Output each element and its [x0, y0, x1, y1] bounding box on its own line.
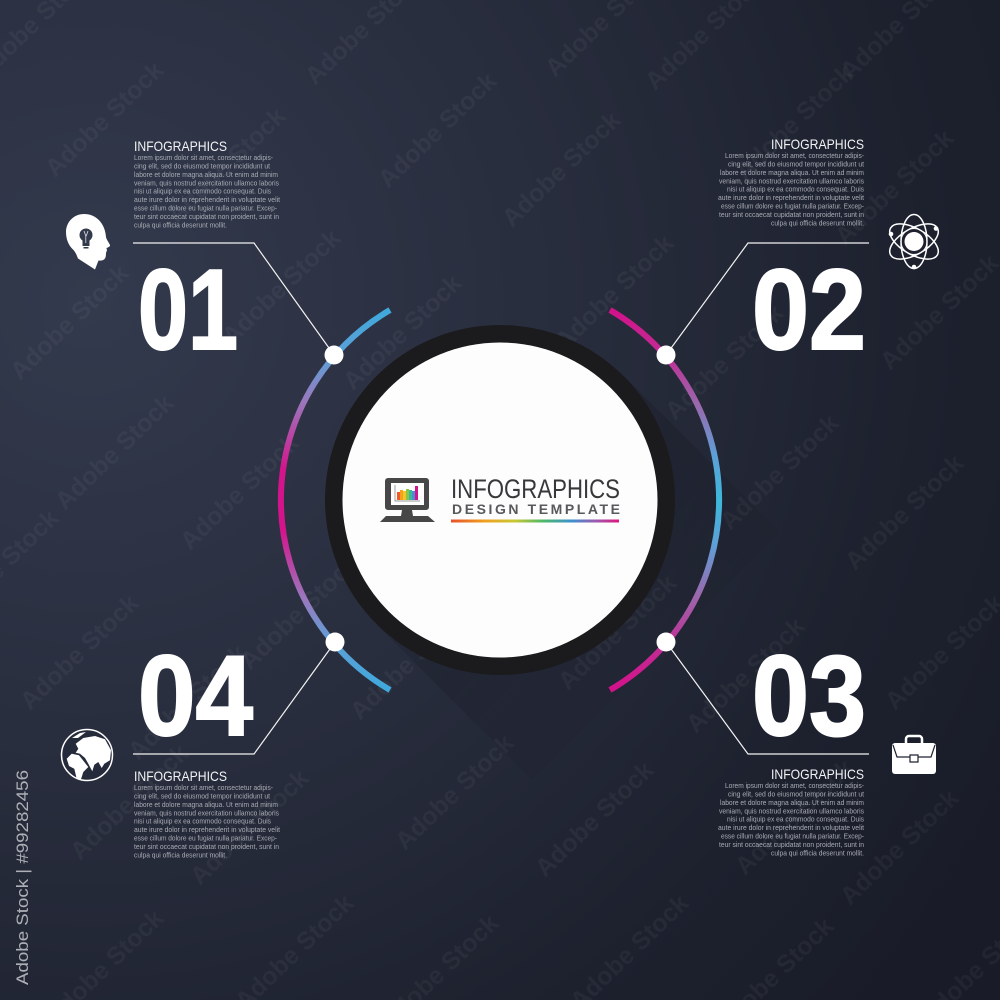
- body 02: cing elit, sed do eiusmod tempor incididunt ut: [728, 159, 864, 168]
- body 03: Lorem ipsum dolor sit amet, consectetur adipis-: [725, 781, 865, 790]
- heading 01: INFOGRAPHICS: [134, 139, 227, 154]
- body 03: teur sint occaecat cupidatat non proident, sunt in: [719, 840, 864, 849]
- body 02: Lorem ipsum dolor sit amet, consectetur adipis-: [725, 151, 865, 160]
- watermark pattern: Adobe Stock: [553, 569, 682, 695]
- body 04: [134, 783, 280, 860]
- body 03: nisi ut aliquip ex ea commodo consequat. Duis: [727, 815, 864, 824]
- watermark pattern: Adobe Stock: [715, 409, 844, 535]
- watermark pattern: Adobe Stock: [840, 449, 969, 575]
- connector 02: [656, 243, 869, 364]
- watermark pattern: Adobe Stock: [40, 56, 169, 182]
- watermark pattern: Adobe Stock: [338, 269, 467, 395]
- number 01: 01: [138, 247, 238, 374]
- heading 03: INFOGRAPHICS: [771, 767, 864, 782]
- body 03: culpa qui officia deserunt mollit.: [771, 848, 864, 858]
- watermark pattern: Adobe Stock: [5, 259, 134, 385]
- number 03: 03: [752, 633, 866, 760]
- watermark pattern: Adobe Stock: [660, 299, 789, 425]
- icon: globe: [62, 730, 112, 780]
- body 04: esse cillum dolore eu fugiat nulla pariatur. Excep-: [134, 834, 278, 843]
- watermark pattern: Adobe Stock: [123, 639, 252, 765]
- body 02: esse cillum dolore eu fugiat nulla pariatur. Excep-: [721, 202, 865, 211]
- text block 01: [134, 139, 280, 230]
- body 02: nisi ut aliquip ex ea commodo consequat. Duis: [727, 185, 864, 194]
- watermark pattern: Adobe Stock: [65, 739, 194, 865]
- left gradient arc: [281, 310, 390, 690]
- watermark pattern: Adobe Stock: [345, 599, 474, 725]
- body 04: cing elit, sed do eiusmod tempor incididunt ut: [134, 791, 270, 800]
- watermark pattern: Adobe Stock: [550, 229, 679, 355]
- body 02: culpa qui officia deserunt mollit.: [771, 218, 864, 228]
- body 02: [718, 151, 865, 228]
- watermark pattern: Adobe Stock: [390, 729, 519, 855]
- body 04: veniam, quis nostrud exercitation ullamco laboris: [134, 808, 279, 817]
- watermark pattern: Adobe Stock: [373, 67, 502, 193]
- watermark pattern: Adobe Stock: [217, 224, 346, 350]
- body 04: nisi ut aliquip ex ea commodo consequat. Duis: [134, 817, 271, 826]
- long shadow of central circle: [376, 376, 780, 780]
- body 01: esse cillum dolore eu fugiat nulla pariatur. Excep-: [134, 204, 278, 213]
- watermark pattern: Adobe Stock: [50, 389, 179, 515]
- watermark pattern: Adobe Stock: [15, 589, 144, 715]
- text block 04: [134, 769, 280, 860]
- rainbow bar: [451, 520, 619, 522]
- body 01: veniam, quis nostrud exercitation ullamco laboris: [134, 178, 279, 187]
- watermark pattern: Adobe Stock: [681, 612, 810, 738]
- body 03: esse cillum dolore eu fugiat nulla pariatur. Excep-: [721, 832, 865, 841]
- heading 04: INFOGRAPHICS: [134, 769, 227, 784]
- body 02: labore et dolore magna aliqua. Ut enim ad minim: [720, 168, 864, 177]
- body 01: [134, 153, 280, 230]
- body 03: aute irure dolor in reprehenderit in voluptate velit: [718, 823, 864, 832]
- text block 02: [718, 137, 865, 228]
- heading 02: INFOGRAPHICS: [771, 137, 864, 152]
- body 01: cing elit, sed do eiusmod tempor incididunt ut: [134, 161, 270, 170]
- connector 03: [656, 632, 869, 754]
- body 03: labore et dolore magna aliqua. Ut enim ad minim: [720, 798, 864, 807]
- logo title: INFOGRAPHICS: [451, 474, 620, 504]
- watermark pattern: Adobe Stock: [730, 59, 859, 185]
- body 02: veniam, quis nostrud exercitation ullamco laboris: [719, 176, 864, 185]
- body 01: teur sint occaecat cupidatat non proident, sunt in: [134, 212, 279, 221]
- icon: computer monitor with bar chart: [380, 478, 435, 522]
- icon: head with light bulb: [66, 214, 110, 270]
- body 01: culpa qui officia deserunt mollit.: [134, 220, 227, 230]
- number 04: 04: [138, 633, 253, 760]
- body 04: teur sint occaecat cupidatat non proident, sunt in: [134, 842, 279, 851]
- connector 01: [133, 243, 344, 364]
- watermark pattern: Adobe Stock: [830, 124, 959, 250]
- body 02: aute irure dolor in reprehenderit in voluptate velit: [718, 193, 864, 202]
- icon: briefcase: [892, 736, 936, 774]
- body 01: labore et dolore magna aliqua. Ut enim ad minim: [134, 170, 278, 179]
- body 04: culpa qui officia deserunt mollit.: [134, 850, 227, 860]
- right gradient arc: [610, 310, 719, 690]
- watermark pattern: Adobe Stock: [175, 429, 304, 555]
- body 04: labore et dolore magna aliqua. Ut enim ad minim: [134, 800, 278, 809]
- body 03: veniam, quis nostrud exercitation ullamco laboris: [719, 806, 864, 815]
- text block 03: [718, 767, 865, 858]
- central logo: [380, 474, 620, 522]
- icon: atom: [884, 214, 944, 269]
- body 01: Lorem ipsum dolor sit amet, consectetur adipis-: [134, 153, 274, 162]
- central circle: [325, 325, 675, 675]
- logo subtitle: DESIGN TEMPLATE: [452, 501, 620, 517]
- body 02: teur sint occaecat cupidatat non proident, sunt in: [719, 210, 864, 219]
- watermark pattern: Adobe Stock: [185, 764, 314, 890]
- watermark pattern: Adobe Stock: [162, 102, 291, 228]
- watermark pattern: Adobe Stock: [497, 106, 626, 232]
- number 02: 02: [752, 247, 866, 374]
- body 04: aute irure dolor in reprehenderit in voluptate velit: [134, 825, 280, 834]
- body 03: cing elit, sed do eiusmod tempor incididunt ut: [728, 789, 864, 798]
- body 01: nisi ut aliquip ex ea commodo consequat. Duis: [134, 187, 271, 196]
- watermark pattern: Adobe Stock: [530, 756, 659, 882]
- watermark pattern: Adobe Stock: [835, 784, 964, 910]
- body 04: Lorem ipsum dolor sit amet, consectetur adipis-: [134, 783, 274, 792]
- watermark pattern: Adobe Stock: [730, 754, 859, 880]
- body 03: [718, 781, 865, 858]
- watermark pattern: Adobe Stock: [235, 549, 364, 675]
- body 01: aute irure dolor in reprehenderit in voluptate velit: [134, 195, 280, 204]
- side credit: Adobe Stock id: Adobe Stock | #99282456: [13, 770, 32, 985]
- connector 04: [133, 632, 344, 754]
